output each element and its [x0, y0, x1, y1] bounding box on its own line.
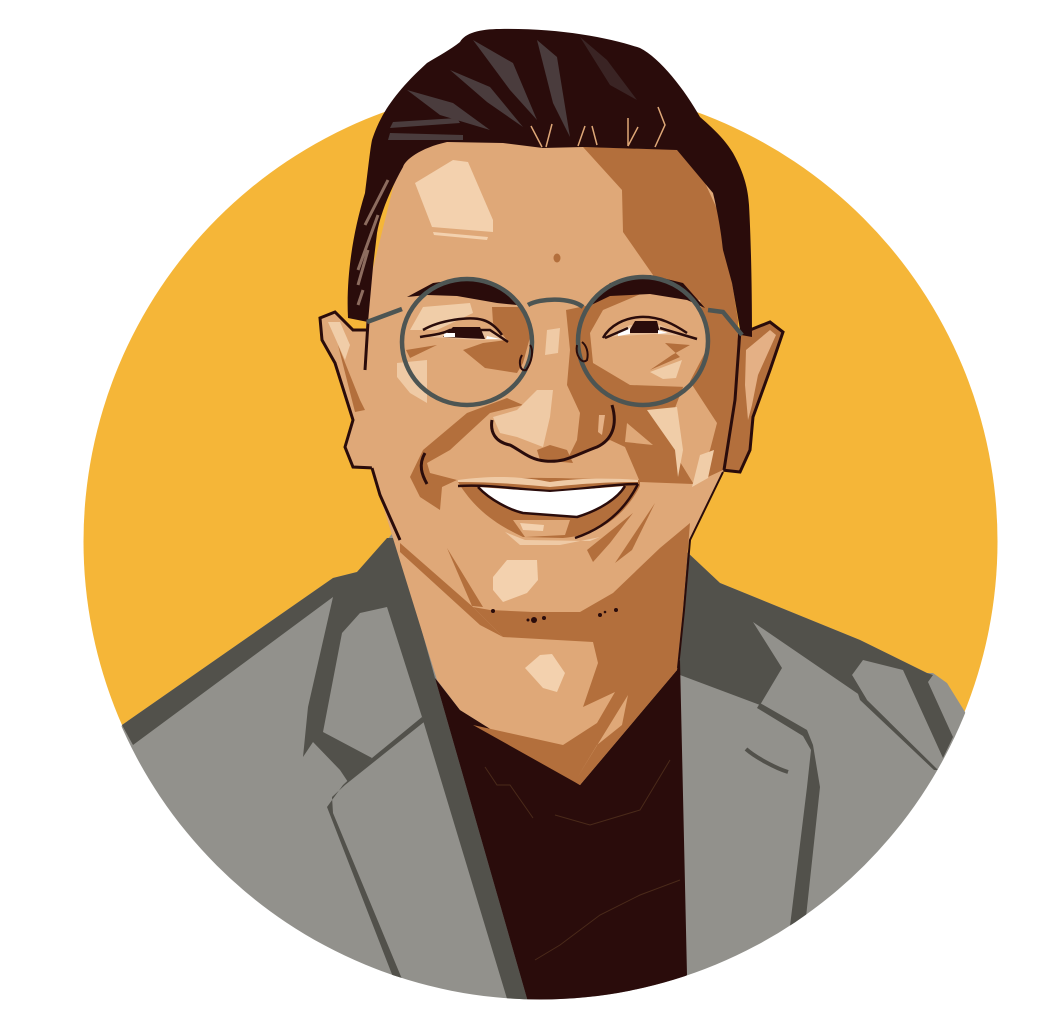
right eye	[605, 325, 685, 337]
nose	[492, 328, 614, 463]
chin strokes	[587, 503, 655, 563]
left shoulder edge and collar	[122, 538, 528, 1002]
pocket slit	[746, 749, 788, 772]
jacket crease	[852, 675, 938, 770]
neck light stripe	[577, 695, 628, 778]
jacket	[122, 534, 966, 1000]
mouth	[458, 477, 640, 545]
glasses	[367, 277, 742, 405]
right ear	[722, 322, 783, 472]
right lapel edge	[757, 703, 820, 926]
highlights	[415, 160, 565, 692]
shirt	[435, 660, 687, 1002]
neck highlight	[525, 654, 565, 692]
face shadow	[566, 147, 738, 484]
forehead mole	[554, 254, 560, 262]
hairline slivers	[531, 107, 665, 147]
face outline strokes	[365, 322, 740, 668]
neck shadow	[400, 523, 690, 785]
left face shading	[397, 303, 532, 510]
forehead highlight	[415, 160, 493, 232]
chin highlight	[493, 560, 538, 602]
skin: face and neck	[365, 130, 738, 785]
hair side strands	[358, 180, 388, 305]
left eye	[430, 327, 505, 340]
cheek light patches	[590, 293, 717, 487]
hair	[348, 29, 752, 337]
left ear	[320, 312, 375, 468]
background circle	[84, 84, 998, 998]
figure clothing	[122, 534, 966, 1000]
hair sheen	[388, 37, 637, 140]
left lapel edge	[327, 717, 424, 979]
right collar shadow	[680, 550, 953, 758]
stubble	[491, 608, 618, 623]
eyebrows	[407, 275, 705, 308]
eyes	[420, 317, 697, 342]
